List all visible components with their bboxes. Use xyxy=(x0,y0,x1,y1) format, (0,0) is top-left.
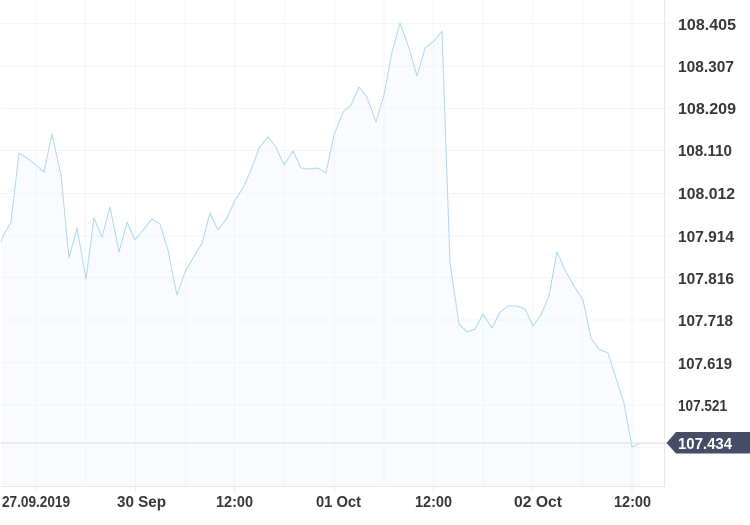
y axis labels: 108.307 xyxy=(678,59,734,76)
current price line xyxy=(1,442,668,444)
current price tag xyxy=(666,432,750,454)
current price tag: 107.434 xyxy=(678,436,732,453)
x axis labels: 02 Oct xyxy=(514,494,562,511)
y axis labels: 108.405 xyxy=(678,17,736,34)
y axis labels xyxy=(678,17,736,415)
y axis labels: 107.619 xyxy=(678,356,732,373)
y axis labels: 108.209 xyxy=(678,101,736,118)
y axis labels: 107.521 xyxy=(678,398,727,415)
x axis labels: 12:00 xyxy=(216,494,253,511)
x axis labels: 01 Oct xyxy=(316,494,361,511)
x axis labels xyxy=(2,494,651,511)
area fill under price line xyxy=(1,23,640,486)
y axis labels: 107.914 xyxy=(678,229,734,246)
y axis labels: 107.718 xyxy=(678,313,733,330)
price line xyxy=(1,23,640,447)
x axis labels: 30 Sep xyxy=(117,494,166,511)
x axis labels: 27.09.2019 xyxy=(2,494,70,511)
y axis labels: 107.816 xyxy=(678,271,734,288)
y axis labels: 108.012 xyxy=(678,186,735,203)
x axis labels: 12:00 xyxy=(614,494,651,511)
y axis labels: 108.110 xyxy=(678,143,732,160)
x axis labels: 12:00 xyxy=(415,494,452,511)
